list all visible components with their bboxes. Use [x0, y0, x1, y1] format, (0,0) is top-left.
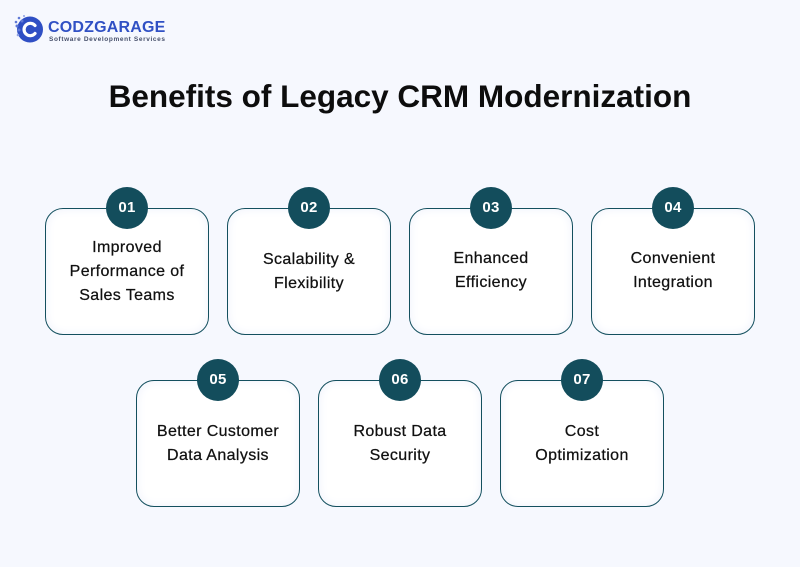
text: Enhanced Efficiency: Efficiency [455, 274, 527, 291]
text: Improved Performance of Sales Teams: Performance of [70, 263, 184, 280]
number badge 03: 03 [482, 199, 500, 216]
text: Convenient Integration: Convenient [631, 250, 715, 267]
text: Scalability & Flexibility [263, 251, 355, 292]
text: Convenient Integration: Integration [633, 274, 713, 291]
text: Cost Optimization [535, 423, 629, 464]
number badge 01 [106, 187, 148, 229]
text: Improved Performance of Sales Teams: Improved [92, 239, 162, 256]
number badge 02: 02 [300, 199, 318, 216]
text: Robust Data Security: Security [370, 447, 430, 464]
number badge 06 [379, 359, 421, 401]
text: Scalability & Flexibility: Flexibility [274, 275, 344, 292]
panel: 02 Scalability & Flexibility [227, 187, 391, 335]
panel: 05 Better Customer Data Analysis [136, 359, 300, 507]
text: Better Customer Data Analysis: Data Analysis [167, 447, 269, 464]
text: Robust Data Security [353, 423, 447, 464]
number badge 02 [288, 187, 330, 229]
number badge 04: 04 [664, 199, 682, 216]
logo name: CODZGARAGE [48, 19, 166, 36]
logo [14, 15, 166, 43]
panel: 01 Improved Performance of Sales Teams [45, 187, 209, 335]
number badge 05 [197, 359, 239, 401]
title: Benefits of Legacy CRM Modernization [109, 78, 691, 114]
text: Enhanced Efficiency: Enhanced [453, 250, 529, 267]
panel: 06 Robust Data Security [318, 359, 482, 507]
text: Better Customer Data Analysis: Better Customer [157, 423, 279, 440]
icon: logo mark [14, 15, 43, 42]
panel: 07 Cost Optimization [500, 359, 664, 507]
text: Improved Performance of Sales Teams: Sales Teams [79, 287, 175, 304]
text: Enhanced Efficiency [453, 250, 529, 291]
number badge 07 [561, 359, 603, 401]
text: Scalability & Flexibility: Scalability & [263, 251, 355, 268]
text: Better Customer Data Analysis [157, 423, 279, 464]
panel: 03 Enhanced Efficiency [409, 187, 573, 335]
number badge 07: 07 [573, 371, 591, 388]
text: Improved Performance of Sales Teams [70, 239, 184, 304]
text: Robust Data Security: Robust Data [353, 423, 447, 440]
number badge 06: 06 [391, 371, 409, 388]
panel: 04 Convenient Integration [591, 187, 755, 335]
text: Convenient Integration [631, 250, 715, 291]
text: Cost Optimization: Cost [565, 423, 599, 440]
logo tagline: Software Development Services [49, 36, 166, 43]
number badge 05: 05 [209, 371, 227, 388]
number badge 03 [470, 187, 512, 229]
text: Cost Optimization: Optimization [535, 447, 629, 464]
number badge 01: 01 [118, 199, 136, 216]
number badge 04 [652, 187, 694, 229]
